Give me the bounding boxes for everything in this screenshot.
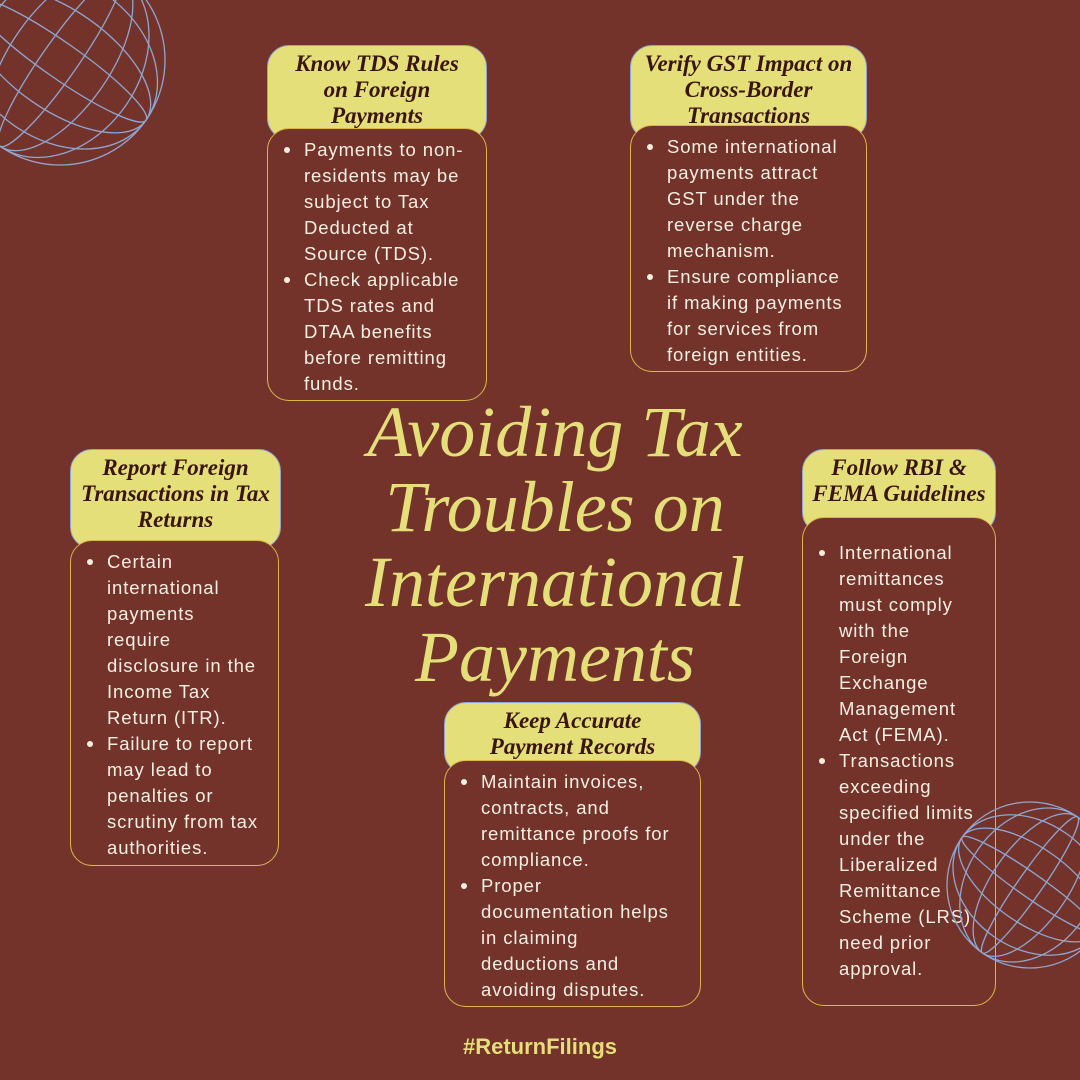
text: records: remittance proofs for bbox=[481, 823, 670, 844]
text: RBI: need prior bbox=[839, 932, 931, 953]
panel: GST bbox=[630, 45, 867, 372]
text: TDS: Payments to non- bbox=[304, 139, 463, 160]
text: RBI: under the bbox=[839, 828, 925, 849]
heading: report: Report Foreign bbox=[102, 455, 249, 480]
text: RBI: Foreign bbox=[839, 646, 908, 667]
heading: GST bbox=[630, 45, 867, 140]
text: report: payments bbox=[107, 603, 194, 624]
text: RBI: Act (FEMA). bbox=[839, 724, 950, 745]
text: RBI: specified limits bbox=[839, 802, 974, 823]
text: report: penalties or bbox=[107, 785, 213, 806]
text: RBI: Liberalized bbox=[839, 854, 938, 875]
heading: GST: Verify GST Impact on bbox=[645, 51, 852, 76]
text: TDS: residents may be bbox=[304, 165, 459, 186]
text: RBI: approval. bbox=[839, 958, 923, 979]
text: report: international bbox=[107, 577, 220, 598]
panel: records bbox=[444, 702, 701, 1007]
text: records: deductions and bbox=[481, 953, 619, 974]
text: records: Proper bbox=[481, 875, 542, 896]
panel: RBI bbox=[802, 449, 996, 1006]
text: RBI: International bbox=[839, 542, 953, 563]
text: GST bbox=[630, 125, 867, 372]
text: records: in claiming bbox=[481, 927, 578, 948]
heading: RBI: FEMA Guidelines bbox=[812, 481, 986, 506]
title: Troubles on bbox=[385, 467, 725, 547]
icon: globe top-left bbox=[0, 0, 166, 166]
text: GST: Ensure compliance bbox=[667, 266, 840, 287]
text: RBI: Remittance bbox=[839, 880, 942, 901]
title: Avoiding Tax bbox=[367, 392, 743, 472]
text: records: documentation helps bbox=[481, 901, 669, 922]
text: RBI: Scheme (LRS) bbox=[839, 906, 971, 927]
heading: RBI: Follow RBI & bbox=[831, 455, 967, 480]
text: report: Failure to report bbox=[107, 733, 253, 754]
text: records: Maintain invoices, bbox=[481, 771, 644, 792]
text: GST: Some international bbox=[667, 136, 837, 157]
heading: records bbox=[444, 702, 701, 774]
text: GST: payments attract bbox=[667, 162, 818, 183]
text: RBI: must comply bbox=[839, 594, 953, 615]
heading: records: Payment Records bbox=[490, 734, 655, 759]
text: GST: for services from bbox=[667, 318, 819, 339]
heading: GST: Cross-Border bbox=[685, 77, 812, 102]
text: report: require bbox=[107, 629, 171, 650]
heading: TDS bbox=[267, 45, 487, 140]
text: RBI bbox=[802, 517, 996, 1006]
text: records: contracts, and bbox=[481, 797, 610, 818]
text: RBI: Transactions bbox=[839, 750, 955, 771]
text: TDS: before remitting bbox=[304, 347, 447, 368]
heading: report: Returns bbox=[138, 507, 213, 532]
heading: report bbox=[70, 449, 281, 549]
text: TDS bbox=[267, 128, 487, 401]
text: GST: mechanism. bbox=[667, 240, 776, 261]
text: RBI: with the bbox=[839, 620, 910, 641]
text: RBI: exceeding bbox=[839, 776, 931, 797]
text: records: avoiding disputes. bbox=[481, 979, 645, 1000]
text: TDS: Check applicable bbox=[304, 269, 459, 290]
text: GST: foreign entities. bbox=[667, 344, 808, 365]
title bbox=[364, 392, 745, 697]
title: Payments bbox=[415, 617, 695, 697]
text: records bbox=[444, 760, 701, 1007]
text: TDS: funds. bbox=[304, 373, 360, 394]
text: TDS: DTAA benefits bbox=[304, 321, 433, 342]
text: RBI: Exchange bbox=[839, 672, 928, 693]
panel: report bbox=[70, 449, 281, 866]
heading: GST: Transactions bbox=[687, 103, 810, 128]
text: GST: reverse charge bbox=[667, 214, 803, 235]
text: report: disclosure in the bbox=[107, 655, 256, 676]
heading: report: Transactions in Tax bbox=[81, 481, 270, 506]
title: International bbox=[365, 542, 745, 622]
text: report: Return (ITR). bbox=[107, 707, 227, 728]
text: RBI: remittances bbox=[839, 568, 945, 589]
heading: TDS: on Foreign bbox=[324, 77, 430, 102]
text: TDS: subject to Tax bbox=[304, 191, 429, 212]
text: GST: GST under the bbox=[667, 188, 800, 209]
heading: RBI bbox=[802, 449, 996, 534]
text: report: scrutiny from tax bbox=[107, 811, 258, 832]
hashtag: #ReturnFilings bbox=[463, 1034, 617, 1059]
panel: TDS bbox=[267, 45, 487, 401]
text: report: Income Tax bbox=[107, 681, 210, 702]
icon: globe bottom-right bbox=[946, 801, 1080, 969]
text: TDS: TDS rates and bbox=[304, 295, 435, 316]
text: TDS: Deducted at bbox=[304, 217, 414, 238]
heading: TDS: Know TDS Rules bbox=[295, 51, 459, 76]
text: report: may lead to bbox=[107, 759, 213, 780]
text: GST: if making payments bbox=[667, 292, 843, 313]
heading: records: Keep Accurate bbox=[504, 708, 641, 733]
text: RBI: Management bbox=[839, 698, 956, 719]
text: report: authorities. bbox=[107, 837, 208, 858]
text: TDS: Source (TDS). bbox=[304, 243, 434, 264]
heading: TDS: Payments bbox=[331, 103, 423, 128]
text: records: compliance. bbox=[481, 849, 590, 870]
text: report bbox=[70, 540, 279, 866]
text: report: Certain bbox=[107, 551, 173, 572]
